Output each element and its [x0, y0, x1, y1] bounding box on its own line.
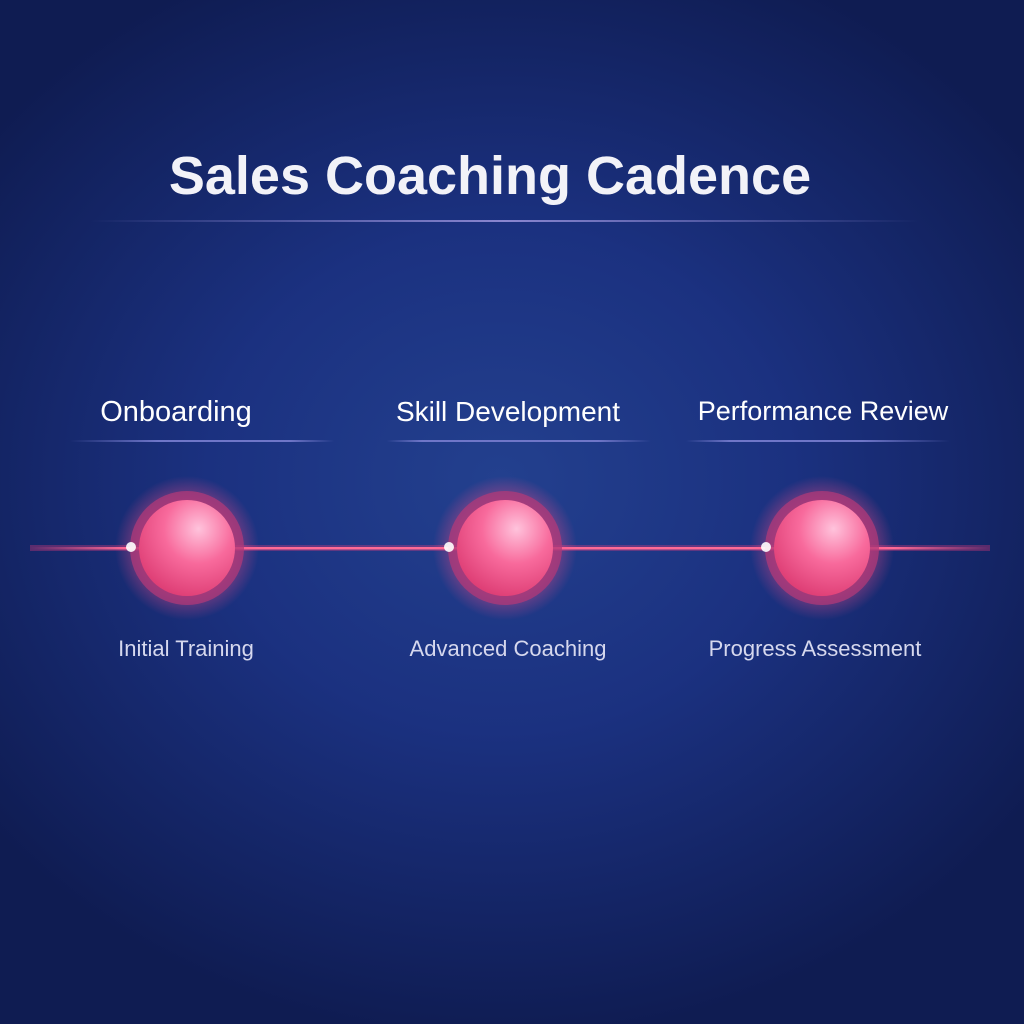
node: performance review [750, 476, 894, 620]
label: initial training: Initial Training [118, 636, 254, 661]
line [30, 545, 990, 551]
node: onboarding [115, 476, 259, 620]
node: skill development [433, 476, 577, 620]
title underline [90, 220, 920, 222]
label: progress assessment: Progress Assessment [709, 636, 921, 661]
heading: skill development: Skill Development [396, 396, 620, 427]
label: advanced coaching: Advanced Coaching [410, 636, 606, 661]
heading underlines [70, 440, 950, 442]
title: Sales Coaching Cadence [169, 146, 811, 206]
heading: onboarding: Onboarding [100, 396, 252, 428]
heading: performance review: Performance Review [698, 396, 948, 426]
